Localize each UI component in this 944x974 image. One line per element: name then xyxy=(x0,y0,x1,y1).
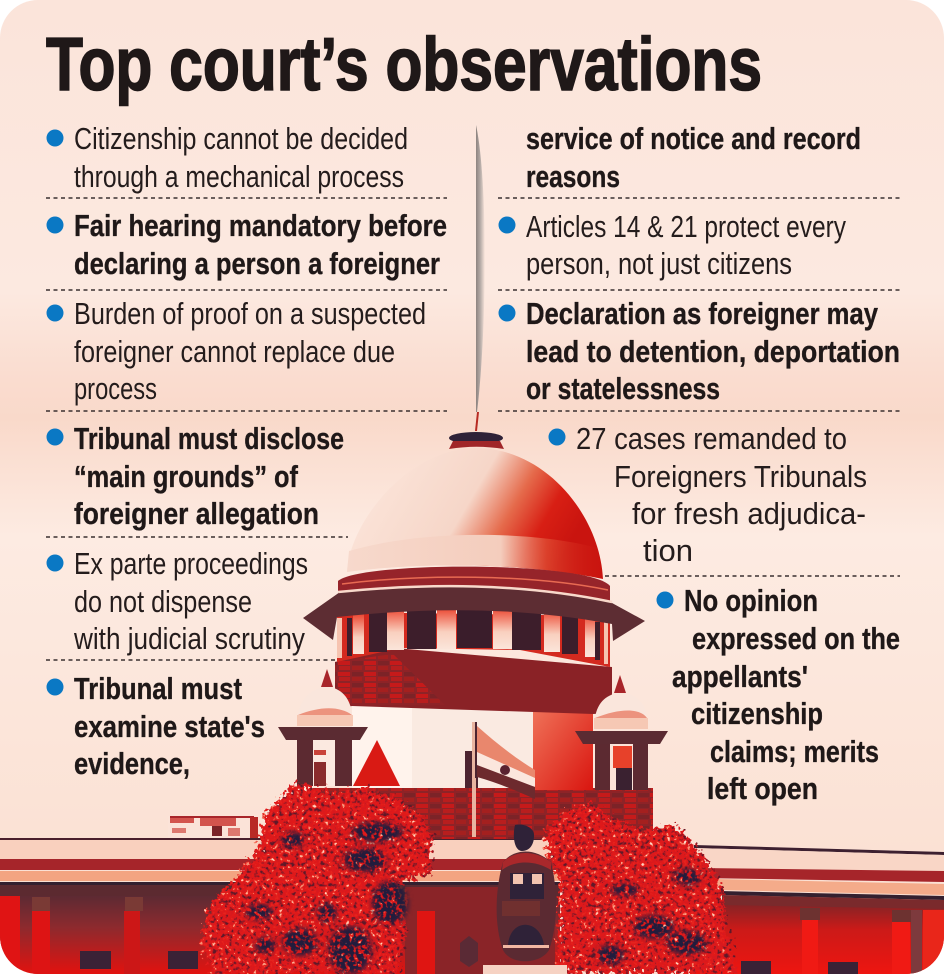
left column bullets xyxy=(46,121,447,781)
bullet item: burden of proof: Burden of proof on a suspected xyxy=(74,296,426,331)
bullet item: mechanical process: through a mechanical process xyxy=(74,159,404,194)
bullet item: no opinion expressed xyxy=(656,583,900,806)
bullet item: state's evidence: examine state's xyxy=(74,709,265,744)
bullet item: 27 cases remanded: tion xyxy=(643,533,693,568)
bullet item: 27 cases remanded: Foreigners Tribunals xyxy=(614,459,867,494)
right column bullets xyxy=(498,121,900,806)
lower building wing left xyxy=(0,816,560,974)
left chhatri xyxy=(278,669,368,786)
tree left xyxy=(200,783,433,974)
illustration: Supreme Court building xyxy=(0,432,944,974)
continued item: notice and reasons: service of notice and record xyxy=(526,121,861,156)
bullet item: no opinion expressed: No opinion xyxy=(684,583,818,618)
tree right xyxy=(545,803,738,974)
bullet item: fair hearing: declaring a person a foreigner xyxy=(74,246,440,281)
bullet item: declaration as foreigner xyxy=(498,296,900,406)
title: Top court’s observations xyxy=(46,22,762,106)
bullet item: no opinion expressed: claims; merits xyxy=(710,734,879,769)
bullet item: state's evidence: Tribunal must xyxy=(74,671,242,706)
divider: tapered vertical rule xyxy=(475,125,485,431)
bullet item: fair hearing: Fair hearing mandatory before xyxy=(74,208,447,243)
bullet item: 27 cases remanded xyxy=(548,421,867,568)
bullet item: Articles 14 & 21 xyxy=(498,209,846,281)
bullet item: declaration as foreigner: Declaration as foreigner may xyxy=(526,296,879,331)
brick drum xyxy=(335,648,612,714)
bullet item: Articles 14 & 21: person, not just citizens xyxy=(526,246,792,281)
continued item: notice and reasons: reasons xyxy=(526,159,620,194)
bullet item: state's evidence xyxy=(46,671,265,781)
colonnade windows xyxy=(337,605,610,667)
bullet item: burden of proof xyxy=(46,296,426,406)
bullet item: no opinion expressed: appellants' xyxy=(672,659,808,694)
bullet item: ex parte: Ex parte proceedings xyxy=(74,546,308,581)
bullet item: Articles 14 & 21: Articles 14 & 21 protect every xyxy=(526,209,846,244)
bullet item: declaration as foreigner: or statelessness xyxy=(526,371,720,406)
bullet item: ex parte: do not dispense xyxy=(74,584,252,619)
bullet item: 27 cases remanded: for fresh adjudica- xyxy=(632,496,866,531)
continued item: notice and reasons xyxy=(526,121,861,194)
bullet item: fair hearing xyxy=(46,208,447,281)
central porch xyxy=(405,887,555,974)
drum band and cornice xyxy=(303,567,645,641)
bullet item: ex parte xyxy=(46,546,308,656)
bullet item: burden of proof: foreigner cannot replace due xyxy=(74,334,395,369)
bullet item: mechanical process xyxy=(46,121,408,194)
bullet item: ex parte: with judicial scrutiny xyxy=(73,621,305,656)
dome xyxy=(347,448,603,579)
bullet item: no opinion expressed: citizenship xyxy=(691,696,823,731)
bullet item: mechanical process: Citizenship cannot be decided xyxy=(74,121,408,156)
bullet item: main grounds: “main grounds” of xyxy=(74,459,299,494)
bullet item: main grounds xyxy=(46,421,344,531)
flag and pole xyxy=(472,722,535,837)
bullet item: state's evidence: evidence, xyxy=(74,746,190,781)
right chhatri xyxy=(575,675,668,790)
base brick wall xyxy=(313,788,653,839)
white block below drum xyxy=(352,706,593,790)
lower building wing right xyxy=(690,845,944,974)
bullet item: no opinion expressed: expressed on the xyxy=(692,621,900,656)
bullet item: main grounds: Tribunal must disclose xyxy=(74,421,344,456)
bullet item: no opinion expressed: left open xyxy=(707,771,818,806)
statue: Lady Justice xyxy=(483,825,567,974)
bullet item: burden of proof: process xyxy=(74,371,157,406)
dome lantern xyxy=(449,432,504,449)
bullet item: 27 cases remanded: 27 cases remanded to xyxy=(576,421,847,456)
bullet item: main grounds: foreigner allegation xyxy=(74,496,319,531)
